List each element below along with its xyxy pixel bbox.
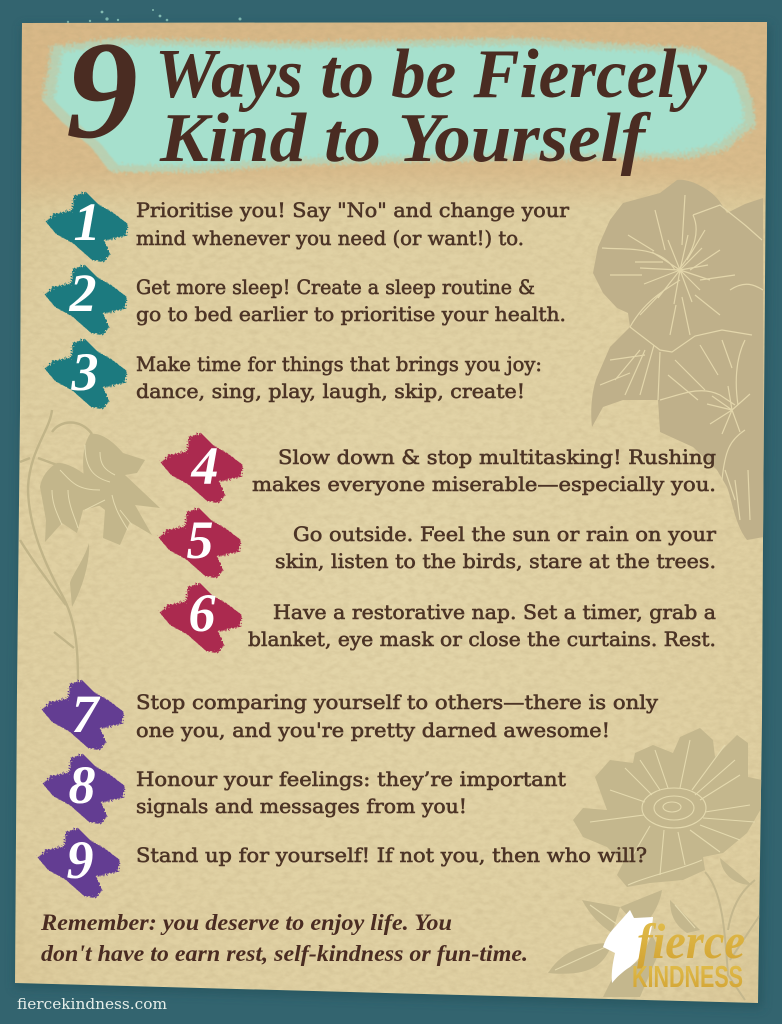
badge 4: 4 (190, 436, 218, 496)
tip 7: one you, and you're pretty darned awesome! (136, 718, 610, 742)
closing reminder (40, 910, 528, 966)
mint paint swash behind title (42, 38, 756, 172)
tip 5: Go outside. Feel the sun or rain on your (293, 522, 716, 546)
tip 4: makes everyone miserable—especially you. (252, 472, 716, 496)
title: second line: Kind to Yourself (159, 100, 652, 177)
tip 5 (159, 508, 716, 578)
tip 1 (46, 192, 569, 262)
badge 9 (38, 828, 120, 898)
illustration: left bell flowers (20, 410, 160, 680)
logo: Fierce Kindness (603, 910, 745, 994)
tip 9 (38, 828, 647, 898)
closing reminder: Remember: you deserve to enjoy life. You (40, 910, 452, 935)
tip 8: signals and messages from you! (136, 794, 467, 818)
tip 9: Stand up for yourself! If not you, then who will? (136, 843, 647, 867)
tip 3: Make time for things that brings you joy: (136, 352, 542, 376)
tip 3: dance, sing, play, laugh, skip, create! (136, 379, 525, 403)
badge 3: 3 (70, 342, 98, 402)
illustration: top right flowers (591, 180, 764, 540)
icon: white lion head (603, 910, 653, 983)
tip 1: Prioritise you! Say "No" and change your (136, 198, 569, 222)
badge 7 (42, 680, 124, 750)
tip 2: Get more sleep! Create a sleep routine & (136, 275, 535, 299)
illustration: bottom right flower (548, 728, 762, 1000)
tip 5: skin, listen to the birds, stare at the trees. (275, 549, 716, 573)
tip 1: mind whenever you need (or want!) to. (136, 226, 524, 250)
badge 6 (160, 583, 242, 653)
badge 8 (43, 754, 125, 824)
tip 8 (43, 754, 566, 824)
badge 6: 6 (188, 583, 216, 643)
tip 6 (160, 583, 716, 653)
title: first line: Ways to be Fiercely (155, 36, 708, 113)
tip 7 (42, 680, 659, 750)
tip 4: Slow down & stop multitasking! Rushing (278, 445, 716, 469)
tip 6: blanket, eye mask or close the curtains. Rest. (248, 627, 716, 651)
badge 5: 5 (186, 510, 214, 570)
badge 7: 7 (72, 684, 100, 744)
badge 1: 1 (74, 192, 100, 252)
tip 7: Stop comparing yourself to others—there is only (136, 690, 659, 714)
tip 6: Have a restorative nap. Set a timer, grab a (273, 600, 716, 624)
closing reminder: don't have to earn rest, self-kindness or fun-time. (41, 941, 528, 966)
logo word: fierce: fierce (637, 913, 745, 969)
website address: fiercekindness.com (17, 997, 167, 1013)
badge 1 (46, 192, 128, 262)
tip 2: go to bed earlier to prioritise your health. (136, 302, 566, 326)
badge 9: 9 (66, 830, 94, 890)
paint splatter at top edge (67, 9, 242, 23)
badge 5 (159, 508, 241, 578)
badge 4 (161, 433, 243, 503)
title: brush numeral 9: 9 (66, 13, 138, 168)
tip 8: Honour your feelings: they’re important (136, 767, 566, 791)
tip 4 (161, 433, 716, 503)
tip 3 (45, 339, 542, 409)
badge 8: 8 (68, 755, 96, 815)
badge 2: 2 (68, 263, 96, 323)
tip 2 (45, 263, 566, 335)
badge 2 (45, 263, 127, 335)
badge 3 (45, 339, 127, 409)
